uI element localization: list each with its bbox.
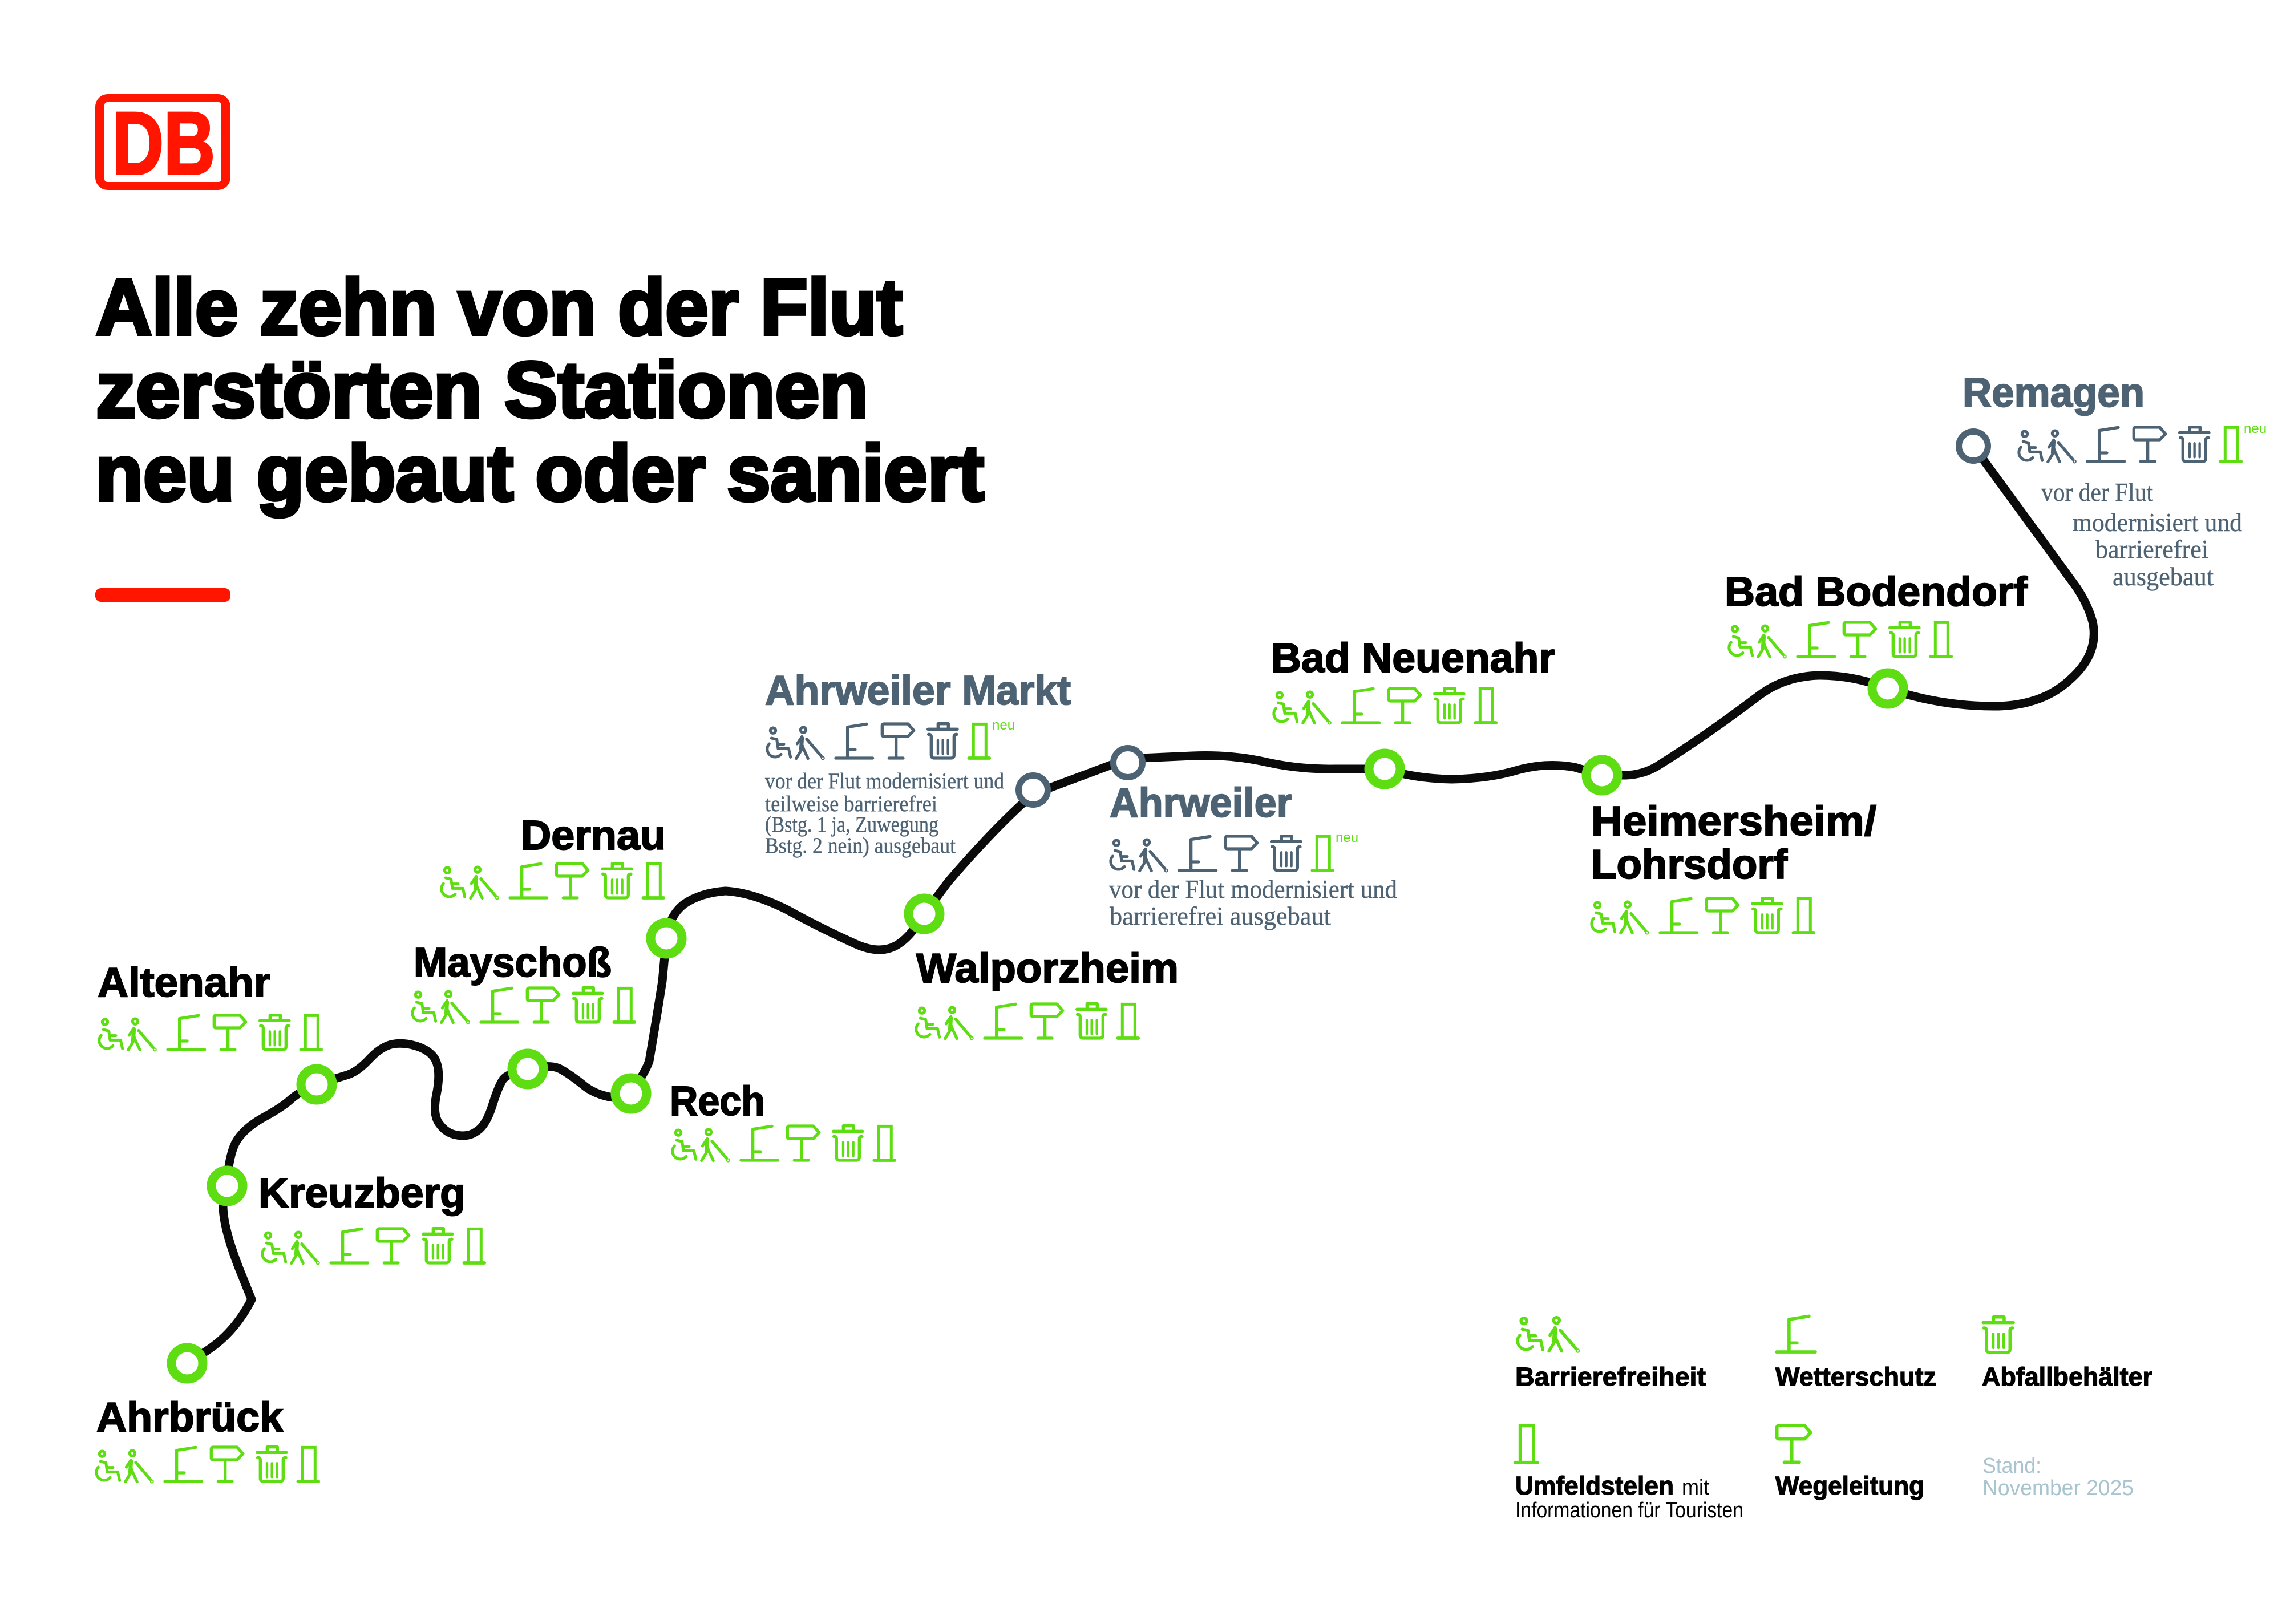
- station: Bad Bodendorf: [1725, 569, 2028, 704]
- station: Altenahr: Altenahr: [98, 960, 270, 1006]
- logo: DB: DB: [112, 94, 215, 193]
- station: Mayschoß: [412, 940, 634, 1085]
- route line: [187, 446, 2094, 1363]
- station: Dernau: Dernau: [521, 813, 666, 858]
- title: [95, 263, 984, 517]
- status date: Stand:: [1982, 1454, 2041, 1478]
- note: Ahrweiler: barrierefrei ausgebaut: [1110, 902, 1331, 930]
- status date: [1982, 1454, 2134, 1500]
- legend item: Umfeldstelen: [1515, 1426, 1743, 1522]
- title: zerstörten Stationen: [96, 346, 868, 434]
- legend item: Umfeldstelen: mit: [1682, 1476, 1709, 1500]
- station: Dernau: [442, 813, 682, 954]
- legend item: Wetterschutz: [1775, 1316, 1936, 1391]
- title: neu gebaut oder saniert: [95, 429, 984, 517]
- icons: Bad Neuenahr: [1274, 689, 1496, 723]
- station: Bad Neuenahr: Bad Neuenahr: [1271, 635, 1555, 681]
- note: Ahrweiler Markt: vor der Flut modernisiert und: [765, 769, 1004, 793]
- station: Ahrbrück: Ahrbrück: [96, 1395, 284, 1440]
- icons: Mayschoß: [412, 988, 634, 1023]
- icons: Heimersheim/Lohrsdorf: [1592, 898, 1814, 933]
- note: Ahrweiler: vor der Flut modernisiert und: [1109, 875, 1397, 904]
- legend item: Wetterschutz: Wetterschutz: [1775, 1362, 1936, 1391]
- note: Ahrweiler Markt: (Bstg. 1 ja, Zuwegung: [765, 812, 938, 837]
- legend item: Wegeleitung: Wegeleitung: [1775, 1471, 1924, 1500]
- station: Heimersheim/Lohrsdorf: Heimersheim/: [1591, 799, 1876, 844]
- icons: Bad Bodendorf: [1729, 622, 1951, 657]
- station: Heimersheim/Lohrsdorf: Lohrsdorf: [1591, 842, 1788, 888]
- station: Rech: Rech: [670, 1079, 765, 1124]
- icons: Altenahr: [99, 1015, 321, 1050]
- icons: Rech: [673, 1126, 895, 1161]
- station: Ahrweiler: Ahrweiler: [1110, 780, 1292, 826]
- red accent bar: [95, 588, 230, 602]
- station: Kreuzberg: Kreuzberg: [258, 1171, 466, 1216]
- legend item: Barrierefreiheit: [1515, 1318, 1706, 1391]
- icons: Walporzheim: [916, 1004, 1138, 1039]
- icons: Dernau: [442, 864, 663, 898]
- note: Ahrweiler: [1109, 875, 1397, 930]
- station: Walporzheim: Walporzheim: [916, 946, 1179, 991]
- icons: Ahrweiler: [1111, 830, 1358, 871]
- icons: Kreuzberg: [262, 1229, 484, 1263]
- icons: Ahrweiler Markt: neu: [992, 718, 1015, 733]
- station: Bad Bodendorf: Bad Bodendorf: [1725, 569, 2028, 615]
- icons: Ahrbrück: [96, 1447, 318, 1482]
- note: Remagen: ausgebaut: [2113, 562, 2214, 591]
- station: Kreuzberg: [211, 1171, 484, 1263]
- icons: Remagen: [2019, 421, 2267, 462]
- note: Ahrweiler Markt: [765, 769, 1004, 858]
- station: Ahrbrück: [96, 1347, 318, 1482]
- station: Walporzheim: [908, 898, 1179, 1039]
- station: Rech: [615, 1078, 895, 1161]
- note: Remagen: [2041, 478, 2242, 591]
- station: Heimersheim/Lohrsdorf: [1586, 760, 1876, 933]
- station: Ahrweiler Markt: Ahrweiler Markt: [765, 668, 1071, 714]
- icons: Ahrweiler: neu: [1336, 830, 1358, 845]
- legend item: Umfeldstelen: Informationen für Touristen: [1515, 1499, 1743, 1522]
- legend: [1515, 1316, 2152, 1522]
- station: Mayschoß: Mayschoß: [414, 940, 612, 986]
- icons: Remagen: neu: [2244, 421, 2267, 436]
- legend item: Abfallbehälter: Abfallbehälter: [1982, 1362, 2152, 1391]
- note: Remagen: barrierefrei: [2095, 535, 2208, 564]
- note: Remagen: vor der Flut: [2041, 478, 2153, 507]
- legend item: Umfeldstelen: Umfeldstelen: [1515, 1471, 1674, 1500]
- legend item: Barrierefreiheit: Barrierefreiheit: [1515, 1362, 1706, 1391]
- note: Remagen: modernisiert und: [2073, 508, 2242, 537]
- note: Ahrweiler Markt: Bstg. 2 nein) ausgebaut: [765, 833, 956, 858]
- legend item: Wegeleitung: [1775, 1425, 1924, 1500]
- title: Alle zehn von der Flut: [96, 263, 903, 351]
- icons: Ahrweiler Markt: [767, 718, 1015, 759]
- station: Remagen: [1959, 370, 2267, 591]
- station: Ahrweiler Markt: [765, 668, 1071, 858]
- station: Ahrweiler: [1109, 748, 1397, 930]
- status date: November 2025: [1982, 1476, 2134, 1500]
- station: Altenahr: [98, 960, 332, 1100]
- station: Bad Neuenahr: [1271, 635, 1555, 785]
- note: Ahrweiler Markt: teilweise barrierefrei: [765, 792, 937, 816]
- legend item: Abfallbehälter: [1982, 1317, 2152, 1391]
- station: Remagen: Remagen: [1963, 370, 2145, 416]
